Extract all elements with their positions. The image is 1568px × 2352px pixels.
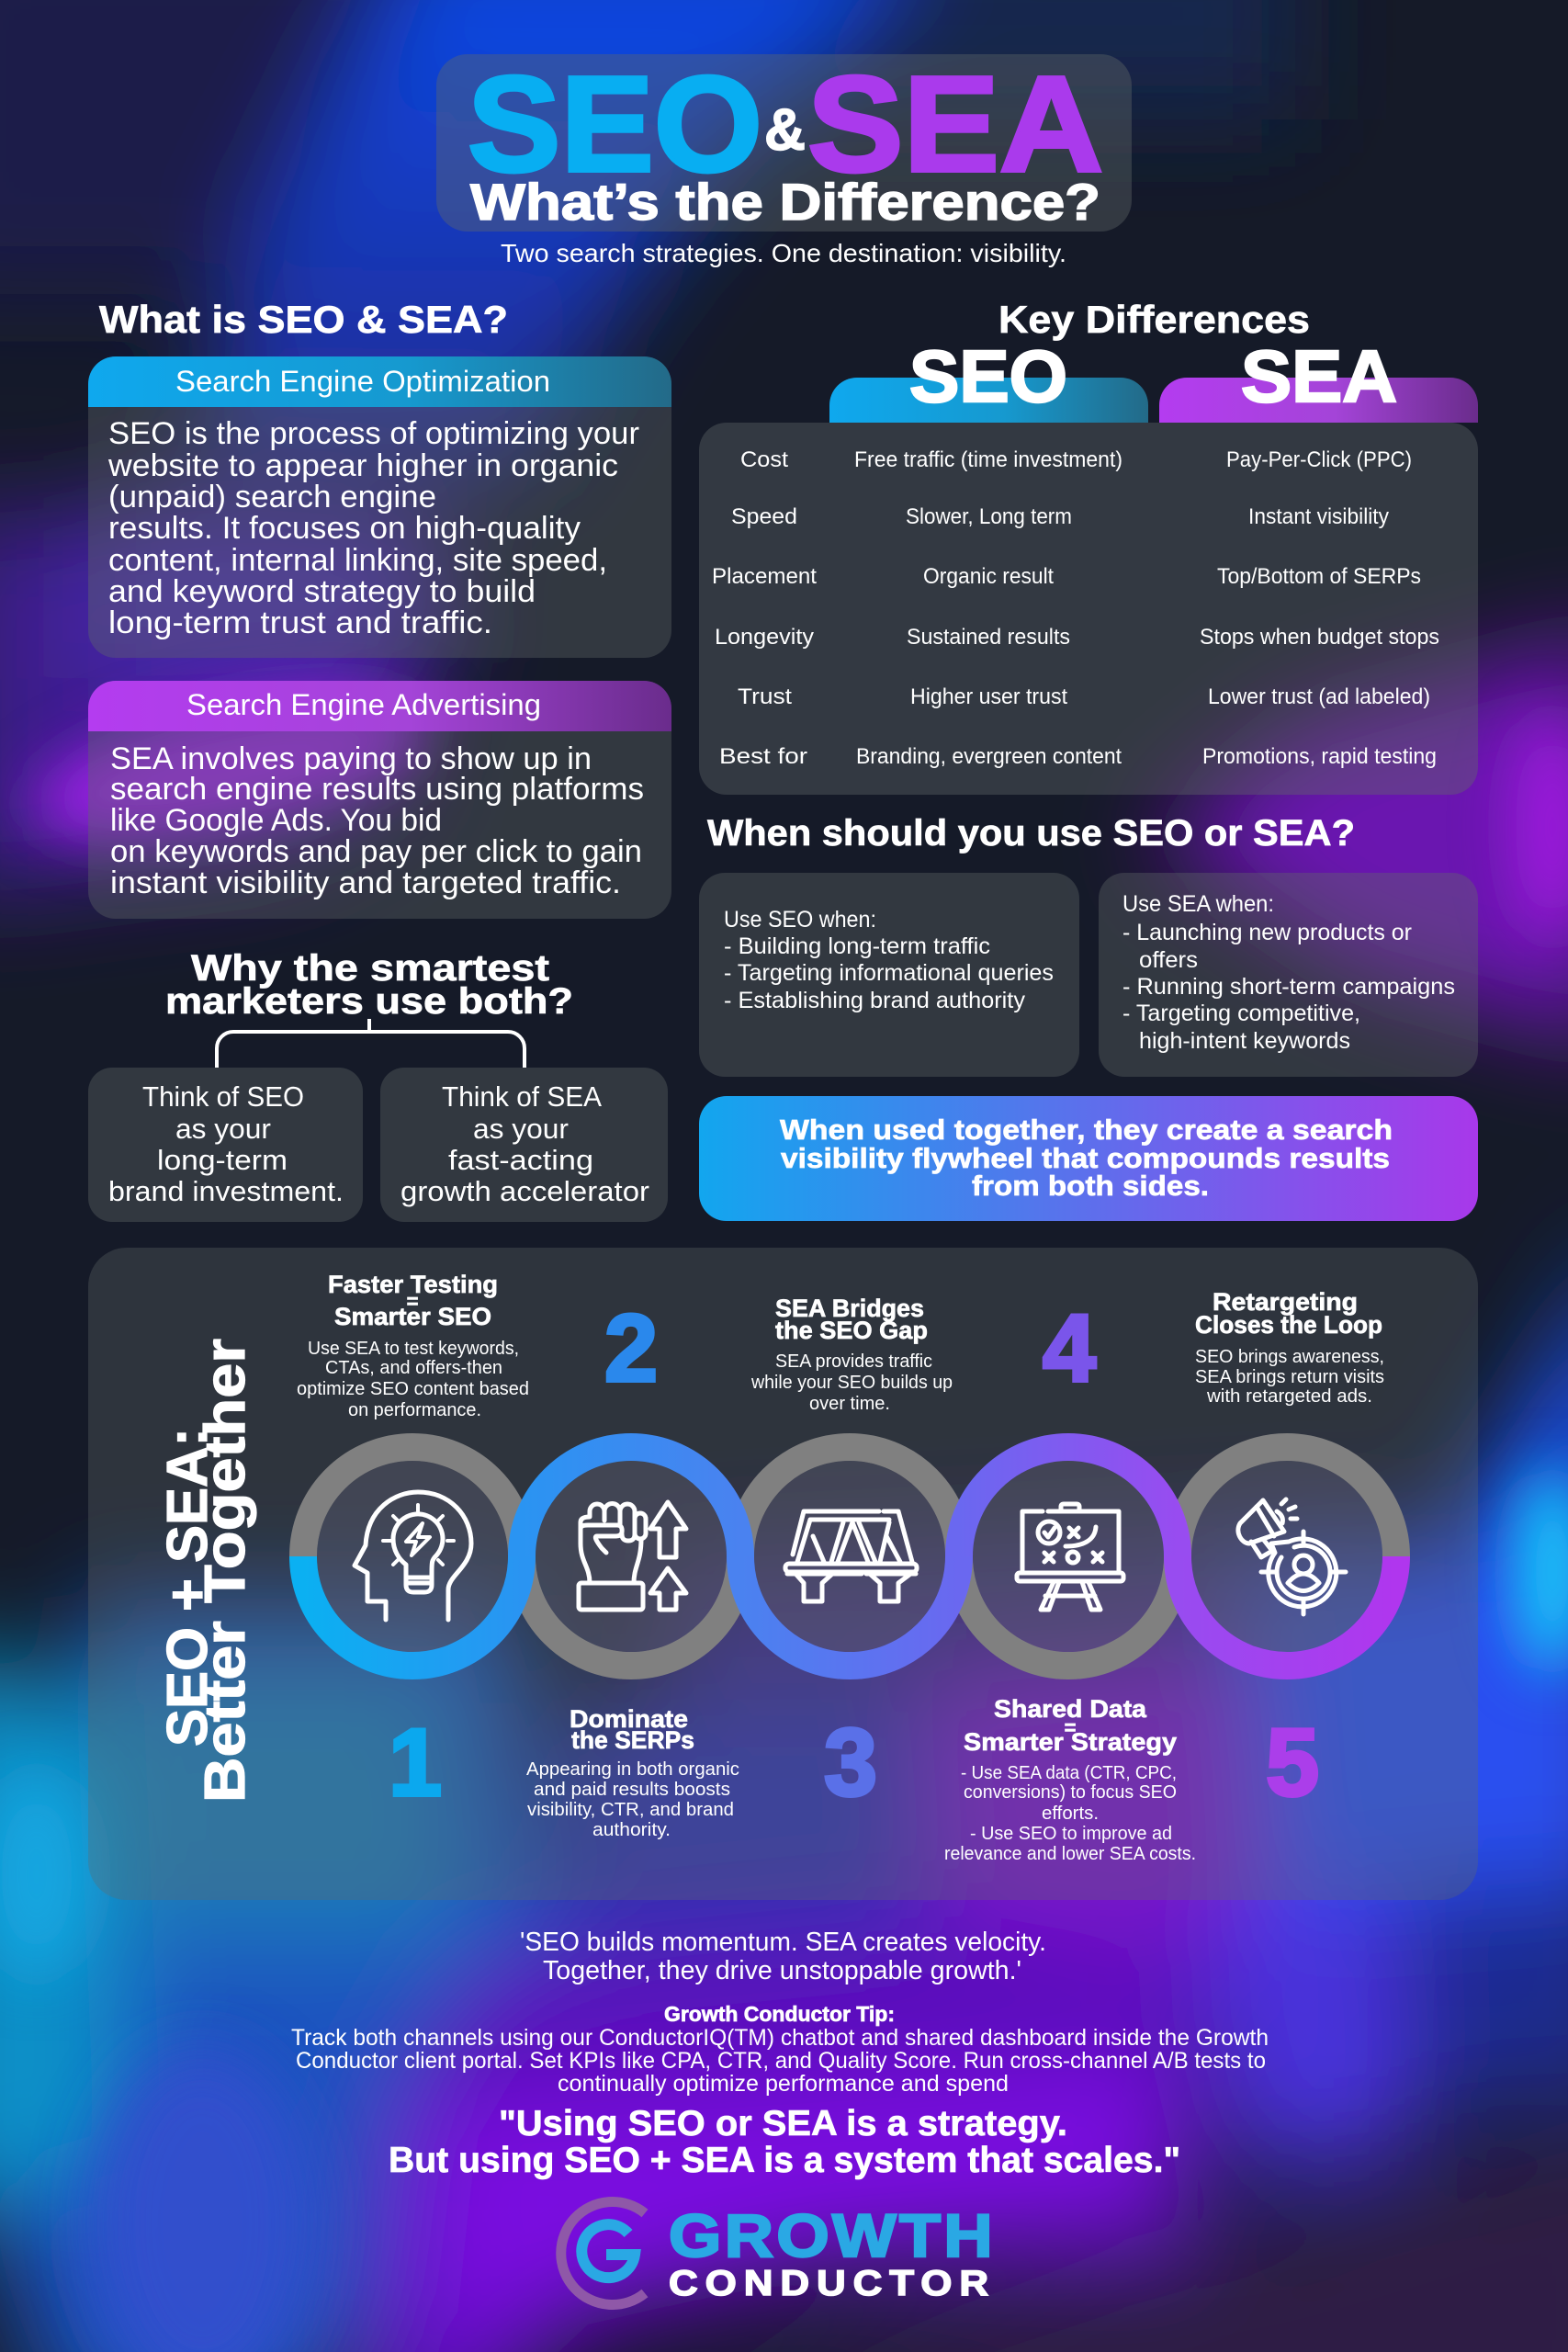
box: think of SEA: growth accelerator xyxy=(400,1175,649,1207)
step 5 text: SEA brings return visits xyxy=(1195,1367,1384,1387)
row: placement: Organic result xyxy=(923,564,1054,589)
row: placement: Top/Bottom of SERPs xyxy=(1217,564,1421,589)
row: longevity xyxy=(715,625,1439,650)
step 4 text: efforts. xyxy=(1042,1804,1099,1824)
title subtitle question: What’s the Difference? xyxy=(470,173,1100,231)
heading: why the smartest marketers use both: Why the smartest xyxy=(191,948,549,989)
row: speed: Instant visibility xyxy=(1248,504,1389,529)
heading: why the smartest marketers use both xyxy=(165,948,573,1022)
step 5 text: Closes the Loop xyxy=(1195,1311,1382,1339)
box: use SEO when: - Establishing brand authority xyxy=(724,988,1026,1013)
body text: SEO: long-term trust and traffic. xyxy=(108,605,492,640)
step 4 text: = xyxy=(1065,1716,1076,1739)
callout: search visibility flywheel: visibility flywheel that compounds results xyxy=(781,1142,1390,1174)
row: best for: Best for xyxy=(719,744,807,769)
icon: strategy board on easel xyxy=(1017,1504,1123,1610)
box: use SEA when: offers xyxy=(1139,947,1198,973)
box: use SEA when: Use SEA when: xyxy=(1122,891,1274,917)
body text: SEO xyxy=(107,416,639,640)
box: think of SEO xyxy=(88,1068,363,1222)
callout: search visibility flywheel: When used together, they create a search xyxy=(780,1114,1393,1146)
step 1 text xyxy=(297,1271,529,1420)
row: cost: Pay-Per-Click (PPC) xyxy=(1226,447,1412,472)
step 1 text: Use SEA to test keywords, xyxy=(308,1339,519,1359)
row: trust: Higher user trust xyxy=(910,684,1067,709)
quote: momentum and velocity xyxy=(520,1928,1046,1985)
step 2 text: authority. xyxy=(592,1820,671,1840)
box: think of SEA xyxy=(380,1068,668,1222)
connector bracket xyxy=(217,1019,525,1068)
rotated heading: SEO + SEA: xyxy=(156,1428,220,1747)
body text: SEO: and keyword strategy to build xyxy=(108,574,536,609)
body text: SEA xyxy=(110,741,644,900)
heading: when should you use: When should you use SEO or SEA? xyxy=(707,813,1355,854)
column title SEA: SEA xyxy=(1241,335,1397,417)
box: use SEO when: - Building long-term traffic xyxy=(724,933,990,959)
closing statement: "Using SEO or SEA is a strategy. xyxy=(499,2104,1067,2143)
growth conductor tip xyxy=(291,2002,1269,2097)
heading: what is SEO and SEA: What is SEO & SEA? xyxy=(99,298,508,341)
row: trust: Lower trust (ad labeled) xyxy=(1208,684,1430,709)
row: best for: Promotions, rapid testing xyxy=(1202,744,1437,769)
body text: SEA: SEA involves paying to show up in xyxy=(110,741,592,776)
step 2 text xyxy=(526,1705,739,1840)
box: think of SEA: as your xyxy=(473,1113,569,1145)
body text: SEO: SEO is the process of optimizing your xyxy=(108,416,639,451)
step 4 text: conversions) to focus SEO xyxy=(964,1782,1177,1803)
row: cost: Cost xyxy=(740,447,788,472)
step 3 text: over time. xyxy=(809,1394,890,1414)
step 2 text: the SERPs xyxy=(571,1726,694,1754)
heading: why the smartest marketers use both: marketers use both? xyxy=(165,981,573,1022)
row: best for xyxy=(719,744,1437,769)
step 2 text: Appearing in both organic xyxy=(526,1759,739,1780)
tagline: Two search strategies. One destination: visibility. xyxy=(501,239,1066,267)
step 4 text: relevance and lower SEA costs. xyxy=(944,1844,1196,1864)
growth conductor tip: Conductor client portal. Set KPIs like CPA, CTR, and Quality Score. Run cross-channel A/B tests to xyxy=(296,2048,1266,2074)
header: SEO xyxy=(88,356,671,407)
row: cost: Free traffic (time investment) xyxy=(854,447,1122,472)
box: use SEA when: - Running short-term campaigns xyxy=(1122,974,1455,1000)
row: longevity: Longevity xyxy=(715,625,814,650)
growth conductor tip: Growth Conductor Tip: xyxy=(664,2002,895,2026)
header text: SEA: Search Engine Advertising xyxy=(186,688,541,721)
row: trust xyxy=(738,684,1430,709)
panel: search engine advertising xyxy=(88,681,671,919)
box: use SEA when: - Launching new products or xyxy=(1122,920,1412,945)
title ampersand: & xyxy=(764,96,806,163)
tab: SEA column xyxy=(1159,378,1478,423)
step 4 text xyxy=(944,1695,1196,1864)
header: SEA xyxy=(88,681,671,731)
step 1 text: optimize SEO content based xyxy=(297,1379,529,1399)
step 3 text: SEA Bridges xyxy=(775,1295,924,1322)
closing statement xyxy=(389,2104,1180,2180)
rotated heading: Better Together xyxy=(194,1339,257,1803)
row: longevity: Stops when budget stops xyxy=(1200,625,1439,650)
step 3 text: SEA provides traffic xyxy=(775,1351,932,1372)
body text: SEA: search engine results using platforms xyxy=(110,772,644,807)
heading: key differences: Key Differences xyxy=(998,298,1310,341)
box: use SEA when: high-intent keywords xyxy=(1139,1028,1350,1054)
step 5 text: Retargeting xyxy=(1213,1288,1358,1316)
logo mark xyxy=(561,2202,645,2305)
icon: truss bridge xyxy=(785,1511,917,1601)
panel: search engine optimization xyxy=(88,356,671,658)
step 1 text: = xyxy=(407,1290,418,1313)
step 5 text: SEO brings awareness, xyxy=(1195,1347,1384,1367)
row: placement: Placement xyxy=(712,564,817,589)
box: think of SEA: Think of SEA xyxy=(442,1080,602,1113)
body text: SEO: content, internal linking, site speed, xyxy=(108,543,607,578)
body text: SEO: results. It focuses on high-quality xyxy=(108,511,581,546)
step 4 number: 4 xyxy=(1043,1295,1096,1402)
icon: fist and up arrows xyxy=(579,1502,686,1610)
box: use SEO when: - Targeting informational queries xyxy=(724,960,1054,986)
step 5 number: 5 xyxy=(1266,1710,1319,1816)
box: use SEO when xyxy=(699,873,1079,1077)
row: speed xyxy=(731,504,1389,529)
step 3 text: while your SEO builds up xyxy=(750,1373,953,1393)
step 2 number: 2 xyxy=(604,1295,658,1402)
step 4 text: Smarter Strategy xyxy=(964,1728,1177,1756)
title panel xyxy=(436,54,1132,232)
header text: SEO: Search Engine Optimization xyxy=(175,365,550,398)
step 3 number: 3 xyxy=(824,1710,877,1816)
box: think of SEO: as your xyxy=(175,1113,271,1145)
step 2 text: Dominate xyxy=(570,1705,688,1733)
closing statement: But using SEO + SEA is a system that scales." xyxy=(389,2141,1180,2180)
title SEO: SEO xyxy=(468,49,762,200)
box: think of SEO: long-term xyxy=(157,1144,288,1176)
step 1 text: Smarter SEO xyxy=(334,1303,491,1330)
body text: SEO: (unpaid) search engine xyxy=(108,480,436,514)
box: use SEA when: - Targeting competitive, xyxy=(1122,1001,1360,1026)
row: speed: Speed xyxy=(731,504,797,529)
step 1 text: Faster Testing xyxy=(328,1271,498,1298)
panel: better together xyxy=(88,1248,1478,1900)
logo word CONDUCTOR: CONDUCTOR xyxy=(669,2264,996,2303)
row: placement xyxy=(712,564,1421,589)
callout: search visibility flywheel xyxy=(699,1096,1478,1221)
quote: momentum and velocity: Together, they drive unstoppable growth.' xyxy=(543,1956,1021,1985)
step 2 text: visibility, CTR, and brand xyxy=(527,1800,734,1820)
logo: growth conductor xyxy=(561,2201,996,2305)
body text: SEA: like Google Ads. You bid xyxy=(110,803,442,838)
rotated heading xyxy=(156,1339,257,1803)
step 3 text xyxy=(750,1295,953,1414)
box: use SEA when xyxy=(1099,873,1478,1077)
quote: momentum and velocity: 'SEO builds momentum. SEA creates velocity. xyxy=(520,1928,1046,1957)
icon: megaphone and target person xyxy=(1238,1499,1346,1614)
box: think of SEA: fast-acting xyxy=(448,1144,593,1176)
icon: head with light bulb xyxy=(355,1492,471,1620)
logo word GROWTH: GROWTH xyxy=(669,2201,996,2269)
row: cost xyxy=(740,447,1412,472)
step 3 text: the SEO Gap xyxy=(775,1317,928,1344)
body text: SEA: instant visibility and targeted traffic. xyxy=(110,865,621,900)
step 5 text: with retargeted ads. xyxy=(1206,1386,1372,1407)
step 4 text: - Use SEA data (CTR, CPC, xyxy=(961,1763,1177,1783)
step 2 text: and paid results boosts xyxy=(534,1780,730,1800)
body text: SEO: website to appear higher in organic xyxy=(107,448,618,483)
row: trust: Trust xyxy=(738,684,792,709)
step 1 text: CTAs, and offers-then xyxy=(325,1358,502,1378)
step 1 text: on performance. xyxy=(348,1400,481,1420)
column title SEO: SEO xyxy=(909,335,1067,417)
row: longevity: Sustained results xyxy=(907,625,1070,650)
box: think of SEO: Think of SEO xyxy=(142,1080,304,1113)
step 4 text: - Use SEO to improve ad xyxy=(970,1824,1172,1844)
title block xyxy=(436,49,1132,232)
step 4 text: Shared Data xyxy=(994,1695,1147,1723)
body text: SEA: on keywords and pay per click to gain xyxy=(110,834,642,869)
comparison table xyxy=(699,423,1478,795)
tab: SEO column xyxy=(829,378,1148,423)
step 1 number: 1 xyxy=(389,1710,442,1816)
ring chain xyxy=(303,1447,1396,1666)
row: speed: Slower, Long term xyxy=(906,504,1072,529)
row: best for: Branding, evergreen content xyxy=(856,744,1122,769)
box: use SEO when: Use SEO when: xyxy=(724,907,876,933)
step 5 text xyxy=(1195,1288,1384,1407)
title SEA: SEA xyxy=(807,49,1103,200)
callout: search visibility flywheel: from both sides. xyxy=(972,1170,1209,1202)
growth conductor tip: Track both channels using our ConductorIQ(TM) chatbot and shared dashboard inside the Growth xyxy=(291,2025,1269,2051)
box: think of SEO: brand investment. xyxy=(108,1175,344,1207)
growth conductor tip: continually optimize performance and spend xyxy=(558,2071,1009,2097)
